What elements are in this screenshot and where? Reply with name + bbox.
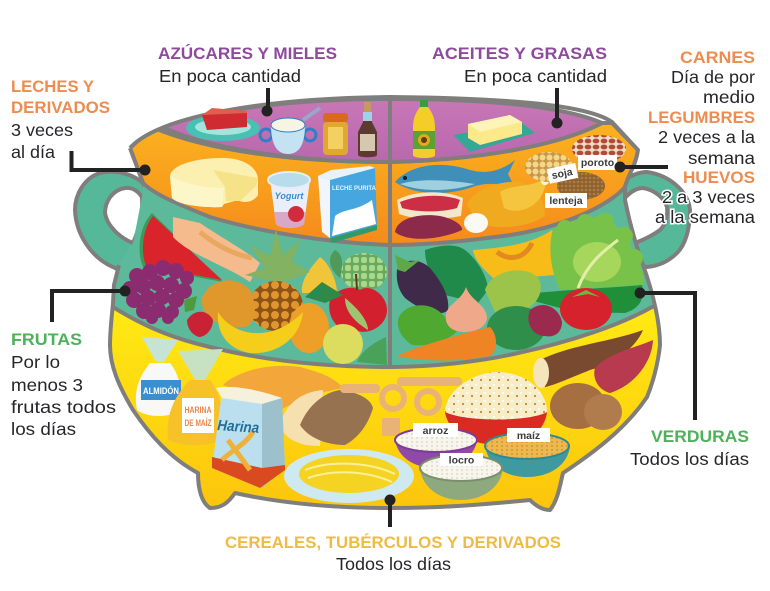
connector: leches xyxy=(72,151,150,176)
text block: cereales: CEREALES, TUBÉRCULOS Y DERIVADOS xyxy=(225,533,561,552)
icon: cassava xyxy=(533,330,643,388)
icon: beetroot xyxy=(528,305,562,336)
icon: butter on dish xyxy=(453,115,535,152)
icon: maiz bowl: maíz xyxy=(517,430,540,442)
icon: cucumber xyxy=(528,285,643,313)
icon: yogurt cup xyxy=(268,172,310,228)
icon: locro bowl xyxy=(420,453,503,500)
icon: kidney beans xyxy=(572,135,626,163)
icon: green pepper xyxy=(398,305,458,345)
connector: azucares xyxy=(262,88,272,116)
icon: apple xyxy=(305,274,387,332)
icon: maiz bowl xyxy=(485,428,570,477)
left pot handle xyxy=(75,172,145,270)
icon: arroz bowl xyxy=(395,423,477,468)
pot body xyxy=(100,97,680,520)
text block: leches y derivados xyxy=(11,77,110,162)
text block: carnes, legumbres, huevos xyxy=(648,48,755,227)
icon: strawberry xyxy=(184,296,213,337)
label: lenteja xyxy=(545,193,587,208)
text block: carnes, legumbres, huevos: 2 veces a la xyxy=(658,127,755,147)
icon: eggplant xyxy=(395,255,448,313)
connector: verduras xyxy=(634,288,695,420)
icon: orange fruit xyxy=(289,303,329,353)
panel: purple sugars and fats band xyxy=(160,99,602,162)
panel: orange dairy and meat band xyxy=(130,123,638,245)
text block: azucares y mieles: AZÚCARES Y MIELES xyxy=(158,44,337,63)
icon: syrup bottle xyxy=(358,102,377,157)
text block: aceites y grasas: ACEITES Y GRASAS xyxy=(432,44,607,63)
icon: lettuce xyxy=(550,213,643,290)
text block: carnes, legumbres, huevos: 2 a 3 veces xyxy=(662,187,755,207)
text block: aceites y grasas: En poca cantidad xyxy=(464,66,607,86)
icon: pasta sticks xyxy=(340,377,462,436)
text block: carnes, legumbres, huevos: medio xyxy=(703,87,755,107)
text block: carnes, legumbres, huevos: LEGUMBRES xyxy=(648,108,755,127)
icon: parsley xyxy=(487,306,545,350)
text block: leches y derivados: LECHES Y xyxy=(11,77,95,96)
icon: popped corn in red bowl xyxy=(445,372,547,445)
centre divider xyxy=(388,98,392,367)
icon: sugar bowl xyxy=(260,108,320,154)
icon: soybeans xyxy=(525,152,573,182)
icon: harina de maiz bag xyxy=(167,349,223,445)
text block: carnes, legumbres, huevos: a la semana xyxy=(655,207,755,227)
icon: leafy beet tops xyxy=(485,270,541,312)
icon: leaf xyxy=(357,337,387,365)
text block: verduras: VERDURAS xyxy=(651,427,749,446)
text block: carnes, legumbres, huevos: HUEVOS xyxy=(683,168,755,187)
icon: bread loaf xyxy=(223,366,343,410)
text block: leches y derivados: 3 veces xyxy=(11,120,73,140)
icon: locro bowl: locro xyxy=(449,454,474,466)
text block: leches y derivados: DERIVADOS xyxy=(11,98,110,117)
text block: frutas: FRUTAS xyxy=(11,330,82,349)
label: poroto: poroto xyxy=(581,157,614,169)
panel: yellow cereals band xyxy=(112,304,658,508)
icon: milk carton: LECHE PURITA xyxy=(332,186,377,192)
icon: pear xyxy=(302,250,342,293)
connector: cereales xyxy=(384,494,396,527)
text block: carnes, legumbres, huevos: semana xyxy=(688,148,755,168)
icon: custard apple xyxy=(341,253,387,291)
icon: arroz bowl: arroz xyxy=(423,425,448,437)
icon: mango xyxy=(202,280,255,327)
icon: yogurt cup: Yogurt xyxy=(275,191,304,201)
connector: legumbres xyxy=(614,162,668,172)
icon: liver xyxy=(395,215,462,239)
icon: harina de maiz bag: HARINA xyxy=(184,405,212,416)
icon: grapes xyxy=(122,260,194,324)
icon: almidon bag xyxy=(136,337,182,416)
icon: milk carton xyxy=(318,166,377,243)
icon: egg xyxy=(464,213,488,233)
text block: frutas: Por lo xyxy=(11,352,60,372)
text block: cereales xyxy=(225,533,561,574)
icon: onion xyxy=(446,287,487,332)
icon: raw beef xyxy=(397,192,463,219)
right pot handle xyxy=(615,172,690,267)
icon: watermelon xyxy=(140,213,223,282)
text block: carnes, legumbres, huevos: CARNES xyxy=(680,48,755,67)
icon: tomato xyxy=(560,288,612,330)
icon: honey jar xyxy=(323,113,348,155)
text block: cereales: Todos los días xyxy=(336,554,451,574)
icon: roast chicken xyxy=(467,177,549,227)
icon: plate of noodles xyxy=(284,449,414,503)
icon: chard leaves xyxy=(425,245,488,303)
label: soja xyxy=(547,163,578,184)
icon: harina flour bag xyxy=(212,387,285,488)
icon: jam block on plate xyxy=(186,108,260,141)
icon: harina de maiz bag: DE MAÍZ xyxy=(184,418,212,429)
icon: sweet potato xyxy=(594,340,653,393)
icon: pale green fruit xyxy=(323,324,363,364)
icon: pineapple xyxy=(245,230,310,331)
text block: frutas xyxy=(11,330,116,439)
text block: frutas: los días xyxy=(11,419,76,439)
text block: azucares y mieles xyxy=(158,44,337,86)
icon: carrot xyxy=(397,327,496,360)
icon: almidon bag: ALMIDÓN xyxy=(143,385,179,396)
text block: leches y derivados: al día xyxy=(11,142,55,162)
label: poroto xyxy=(578,155,617,170)
icon: lentils xyxy=(557,172,605,200)
icon: melon slice xyxy=(173,217,260,282)
icon: potatoes xyxy=(550,383,622,430)
pot outline xyxy=(110,97,660,510)
label: lenteja: lenteja xyxy=(549,195,583,207)
icon: white bread slice xyxy=(280,390,323,446)
text block: carnes, legumbres, huevos: Día de por xyxy=(671,67,755,87)
icon: wholewheat bread slice xyxy=(300,390,373,445)
connector: frutas xyxy=(52,286,130,322)
connector: aceites xyxy=(552,88,562,128)
icon: banana xyxy=(218,312,303,353)
icon: harina flour bag: Harina xyxy=(217,417,260,437)
icon: pasta rings xyxy=(382,387,439,413)
panel: teal fruit and vegetable band xyxy=(114,184,653,365)
icon: fish xyxy=(395,160,515,193)
text block: frutas: frutas todos xyxy=(11,397,116,417)
text block: verduras: Todos los días xyxy=(630,449,749,469)
text block: frutas: menos 3 xyxy=(11,375,83,395)
text block: verduras xyxy=(630,427,749,469)
icon: oil bottle xyxy=(413,100,435,158)
icon: cheese wheel xyxy=(170,158,258,207)
text block: azucares y mieles: En poca cantidad xyxy=(159,66,301,86)
icon: pumpkin wedge xyxy=(473,230,557,280)
text block: aceites y grasas xyxy=(432,44,607,86)
label: soja: soja xyxy=(551,166,574,182)
